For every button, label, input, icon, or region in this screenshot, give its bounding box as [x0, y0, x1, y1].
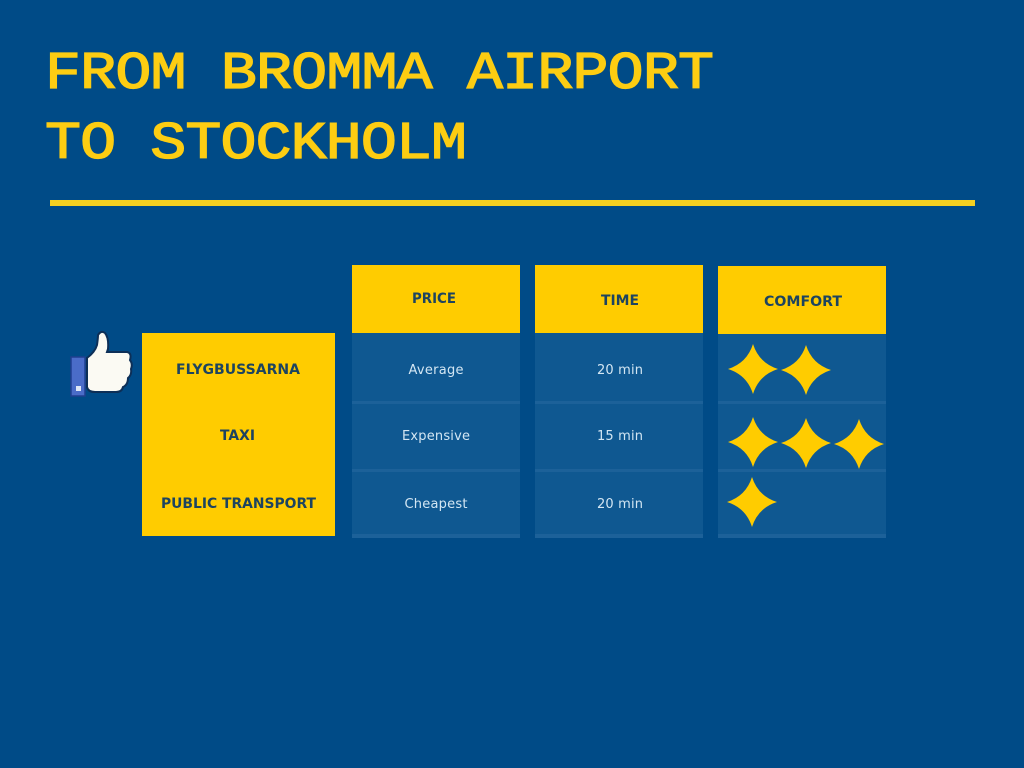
panel: transport options — [142, 333, 335, 536]
title — [45, 44, 714, 174]
price header: PRICE — [412, 291, 456, 307]
price: cheapest: Cheapest — [404, 497, 468, 512]
title divider line — [50, 200, 975, 206]
comfort header — [718, 266, 886, 334]
time header: TIME — [601, 293, 639, 309]
panel: price column — [352, 265, 520, 538]
time header — [535, 265, 703, 333]
title: FROM BROMMA AIRPORT — [45, 44, 714, 104]
title: TO STOCKHOLM — [45, 114, 467, 174]
price: average: Average — [408, 363, 464, 378]
panel: comfort column — [718, 266, 886, 538]
price header — [352, 265, 520, 333]
price: expensive: Expensive — [402, 429, 470, 444]
comfort header: COMFORT — [764, 294, 842, 310]
rating: public transport one star — [727, 477, 777, 527]
panel: time column — [535, 265, 703, 538]
time: public transport: 20 min — [597, 497, 643, 512]
label: Taxi: TAXI — [220, 428, 255, 444]
time: flygbussarna: 20 min — [597, 363, 643, 378]
rating: flygbussarna two stars — [728, 344, 831, 395]
icon: thumbs up — [71, 332, 132, 396]
rating: taxi three stars — [728, 417, 884, 469]
label: Public transport: PUBLIC TRANSPORT — [161, 496, 316, 512]
label: Flygbussarna: FLYGBUSSARNA — [176, 362, 300, 378]
time: taxi: 15 min — [597, 429, 643, 444]
